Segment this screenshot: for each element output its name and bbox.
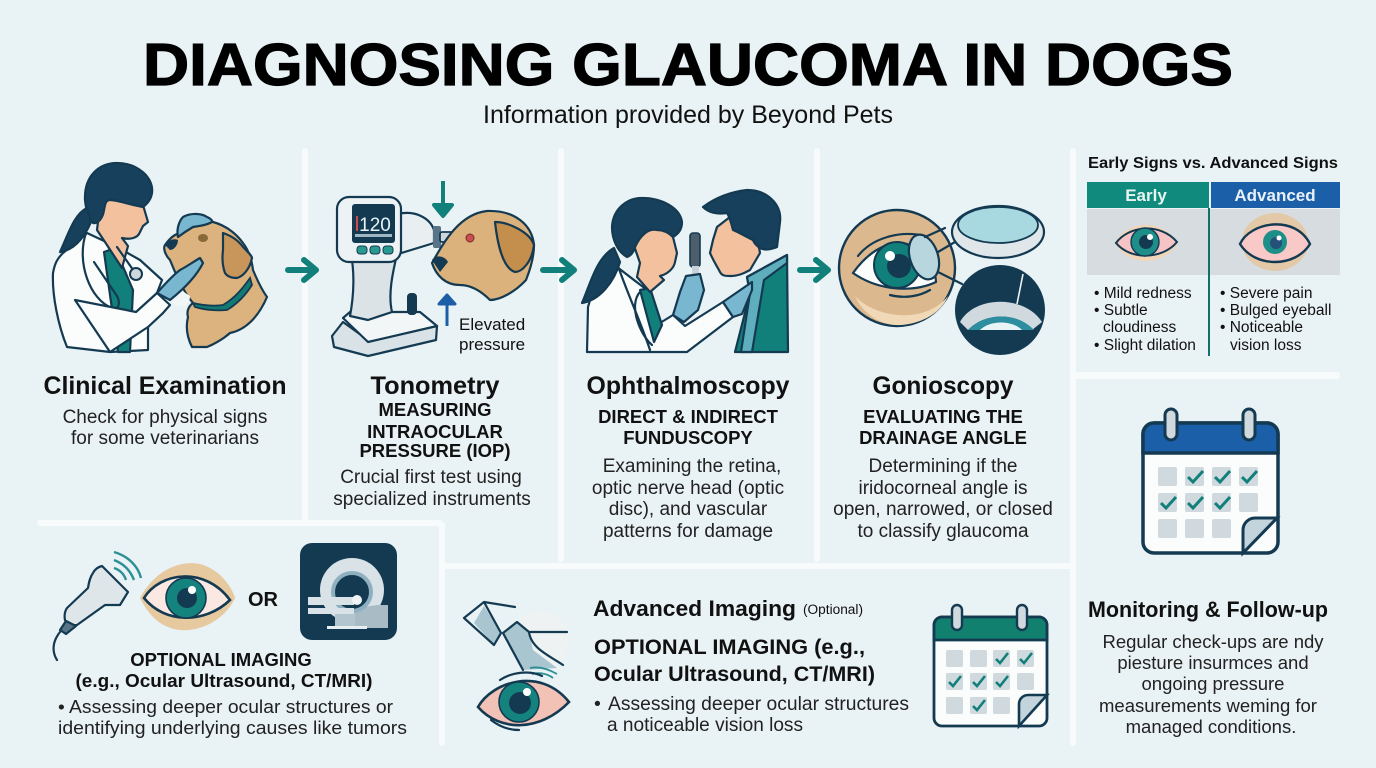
description: Regular check-ups are ndy [1102, 631, 1324, 652]
subheading: FUNDUSCOPY [623, 427, 753, 448]
description: a noticeable vision loss [607, 714, 803, 736]
icon: ultrasound probe [54, 552, 141, 660]
description: Check for physical signs [63, 407, 267, 428]
description: optic nerve head (optic [592, 478, 784, 499]
early signs list: cloudiness [1103, 319, 1176, 336]
subheading: (e.g., Ocular Ultrasound, CT/MRI) [76, 670, 372, 691]
blue pressure arrow [439, 295, 455, 326]
label: OR: OR [248, 589, 279, 611]
early column header: Early [1125, 186, 1167, 205]
description: identifying underlying causes like tumors [58, 717, 407, 738]
description: iridocorneal angle is [858, 478, 1028, 499]
icon: blue calendar [1143, 409, 1278, 553]
description: • [594, 693, 601, 715]
title: DIAGNOSING GLAUCOMA IN DOGS [143, 32, 1233, 98]
panel: clinical examination [44, 163, 286, 449]
panel: early vs advanced signs [1087, 155, 1340, 356]
early column header [1087, 182, 1209, 208]
icon: advanced eye [1240, 213, 1310, 271]
advanced signs list: • Severe pain [1220, 285, 1312, 302]
panel: optional imaging left [54, 543, 407, 738]
advanced column header [1211, 182, 1340, 208]
heading: Clinical Examination [44, 372, 286, 400]
arrow 2 [543, 260, 574, 280]
heading: Monitoring & Follow-up [1088, 597, 1328, 622]
illustration: lens on eye [464, 602, 569, 730]
icon: eye [140, 563, 235, 630]
description: Determining if the [869, 456, 1017, 477]
panel: monitoring and follow-up [1088, 409, 1328, 737]
description: Crucial first test using [340, 467, 522, 488]
subheading: DRAINAGE ANGLE [859, 427, 1027, 448]
green pressure arrow [434, 181, 452, 216]
description: • Assessing deeper ocular structures or [58, 696, 393, 717]
description: Assessing deeper ocular structures [608, 693, 909, 715]
panel: gonioscopy [833, 206, 1053, 542]
subheading: Ocular Ultrasound, CT/MRI) [594, 663, 875, 686]
advanced signs list: vision loss [1230, 337, 1302, 354]
early signs list: • Slight dilation [1094, 337, 1196, 354]
illustration: tonometer and dog: 120 [359, 215, 391, 236]
pressure label: Elevated [459, 315, 525, 334]
heading: Ophthalmoscopy [586, 372, 790, 400]
description: managed conditions. [1126, 716, 1296, 737]
description: specialized instruments [333, 489, 531, 510]
advanced signs list: • Bulged eyeball [1220, 302, 1331, 319]
subheading: INTRAOCULAR [367, 421, 503, 442]
panel: advanced imaging [464, 596, 1047, 736]
panel: tonometry [332, 181, 534, 510]
description: measurements weming for [1099, 695, 1317, 716]
advanced column header: Advanced [1234, 186, 1316, 205]
description: piesture insurmces and [1117, 652, 1309, 673]
subheading: OPTIONAL IMAGING [130, 649, 312, 670]
heading: Gonioscopy [872, 372, 1014, 400]
illustration: tonometer and dog [332, 181, 534, 356]
illustration: eye with gonioscopy lens [839, 206, 1045, 355]
subheading: OPTIONAL IMAGING (e.g., [594, 636, 865, 659]
illustration: vet with ophthalmoscope and patient [582, 190, 788, 352]
arrow 3 [800, 260, 828, 280]
description: Examining the retina, [603, 456, 781, 477]
heading: Advanced Imaging [593, 596, 796, 621]
table heading: Early Signs vs. Advanced Signs [1088, 155, 1338, 172]
description: patterns for damage [603, 521, 773, 542]
heading: Tonometry [370, 372, 500, 400]
subheading: MEASURING [378, 399, 492, 420]
description: ongoing pressure [1142, 673, 1284, 694]
early signs list: • Subtle [1094, 302, 1148, 319]
subheading: PRESSURE (IOP) [359, 440, 511, 461]
subtitle: Information provided by Beyond Pets [483, 101, 893, 129]
icon: teal calendar [934, 605, 1047, 726]
description: for some veterinarians [71, 428, 259, 449]
description: to classify glaucoma [857, 521, 1029, 542]
arrow 1 [288, 260, 316, 280]
illustration: vet examining dog [53, 163, 267, 352]
description: disc), and vascular [609, 499, 768, 520]
early signs list: • Mild redness [1094, 285, 1192, 302]
subheading: DIRECT & INDIRECT [598, 406, 779, 427]
subheading: EVALUATING THE [863, 406, 1023, 427]
pressure label: pressure [459, 335, 525, 354]
description: open, narrowed, or closed [833, 499, 1053, 520]
panel: ophthalmoscopy [582, 190, 790, 542]
heading: (Optional) [803, 602, 863, 617]
icon: early eye [1115, 225, 1178, 261]
icon: MRI scanner [300, 543, 397, 640]
advanced signs list: • Noticeable [1220, 319, 1303, 336]
